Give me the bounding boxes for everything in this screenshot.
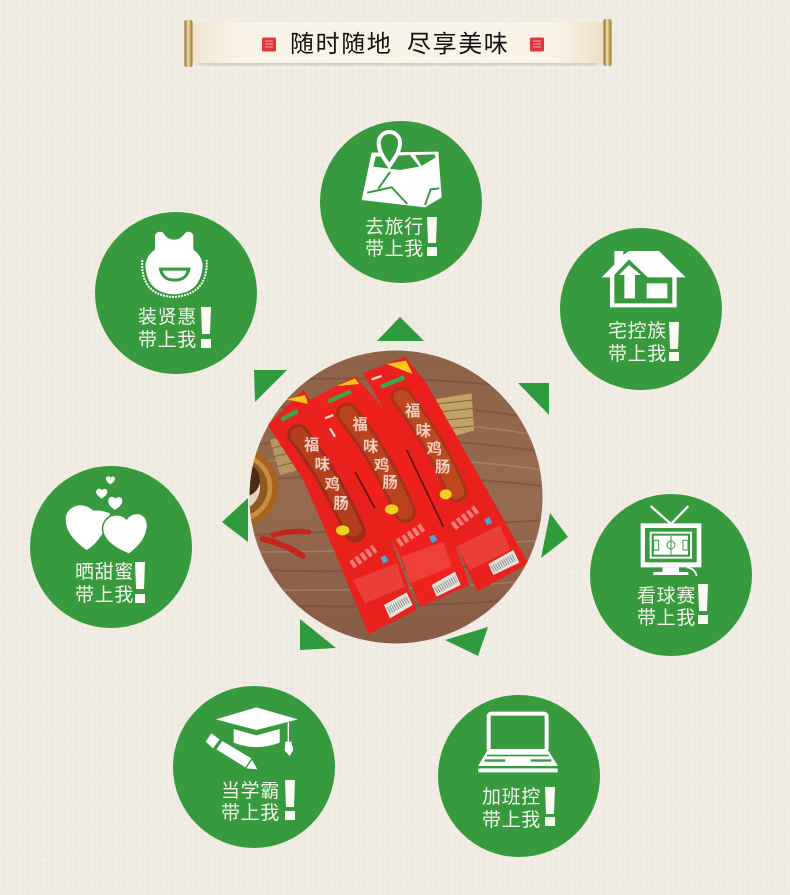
sausage pack 2: 味 (363, 438, 378, 455)
label: sweethearts: 晒甜蜜 (75, 561, 134, 583)
title text: 尽享美味 (407, 31, 509, 58)
badge: housewife (95, 212, 257, 374)
exclamation mark (698, 584, 708, 624)
label: stay at home: 带上我 (608, 343, 667, 365)
sausage pack 3: 味 (416, 423, 431, 440)
label: overtime: 带上我 (482, 809, 541, 831)
badge: watch the match (590, 494, 752, 656)
label: watch the match: 带上我 (637, 607, 696, 629)
exclamation mark (427, 217, 437, 256)
chili peppers (263, 531, 308, 556)
sausage pack 2: 肠 (382, 474, 398, 491)
badge: sweethearts (30, 466, 192, 628)
central product photo (250, 350, 542, 644)
sausage pack 1: 味 (315, 456, 330, 473)
label: housewife (138, 306, 197, 351)
exclamation mark (135, 562, 145, 603)
sausage pack 2 (307, 376, 470, 607)
label: study: 带上我 (221, 802, 280, 824)
arrow: right (541, 513, 568, 558)
label: stay at home (608, 320, 667, 365)
label: overtime (482, 786, 541, 831)
label: sweethearts: 带上我 (75, 584, 134, 606)
icon: hearts (66, 476, 147, 553)
label: travel: 去旅行 (365, 216, 424, 238)
label: study (221, 780, 280, 824)
label: overtime: 加班控 (482, 786, 541, 808)
barcode (384, 592, 413, 618)
exclamation mark (669, 322, 679, 361)
badge: travel (320, 121, 482, 283)
icon: laptop (478, 714, 558, 772)
title text: 随时随地 (290, 31, 392, 58)
label: stay at home: 宅控族 (608, 320, 667, 342)
title banner scroll (184, 19, 612, 67)
barcode (488, 550, 519, 575)
label: sweethearts (75, 561, 134, 606)
label: travel (365, 216, 424, 260)
icon: map and pin (362, 132, 442, 207)
arrow: left (222, 498, 248, 542)
seal left (262, 38, 276, 52)
sausage pack 2: 福 (352, 416, 368, 433)
label: housewife: 带上我 (138, 329, 197, 351)
sausage pack 1: 鸡 (325, 476, 340, 493)
icon: apron (142, 232, 207, 297)
bowl (250, 452, 278, 525)
sausage pack 1 (268, 390, 417, 634)
arrow: upper left (254, 370, 287, 402)
sausage pack 1: 福 (304, 437, 319, 454)
icon: house (602, 251, 686, 307)
sausage pack 1: 肠 (333, 495, 349, 512)
arrow: lower left (300, 619, 336, 650)
sausage pack 3 (325, 357, 528, 592)
arrow: upper right (518, 383, 549, 415)
badge: overtime (438, 695, 600, 857)
arrow: top (377, 317, 424, 341)
sausage pack 2: 鸡 (374, 458, 389, 475)
label: travel: 带上我 (365, 238, 424, 260)
exclamation mark (201, 307, 211, 348)
sausage pack 3: 福 (405, 403, 420, 420)
label: watch the match (637, 585, 696, 629)
barcode (432, 572, 461, 597)
label: watch the match: 看球赛 (637, 585, 696, 607)
bamboo mat (270, 393, 474, 475)
sausage pack 3: 肠 (435, 459, 450, 476)
icon: graduation cap and pencil (206, 707, 298, 769)
badge: stay at home (560, 228, 722, 390)
badge: study (173, 686, 335, 848)
label: study: 当学霸 (221, 780, 280, 802)
label: housewife: 装贤惠 (138, 306, 197, 328)
arrow: lower right (445, 627, 488, 656)
exclamation mark (285, 780, 295, 820)
exclamation mark (545, 787, 555, 826)
seal right (530, 38, 544, 52)
icon: television (641, 506, 701, 576)
sausage pack 3: 鸡 (427, 441, 442, 458)
